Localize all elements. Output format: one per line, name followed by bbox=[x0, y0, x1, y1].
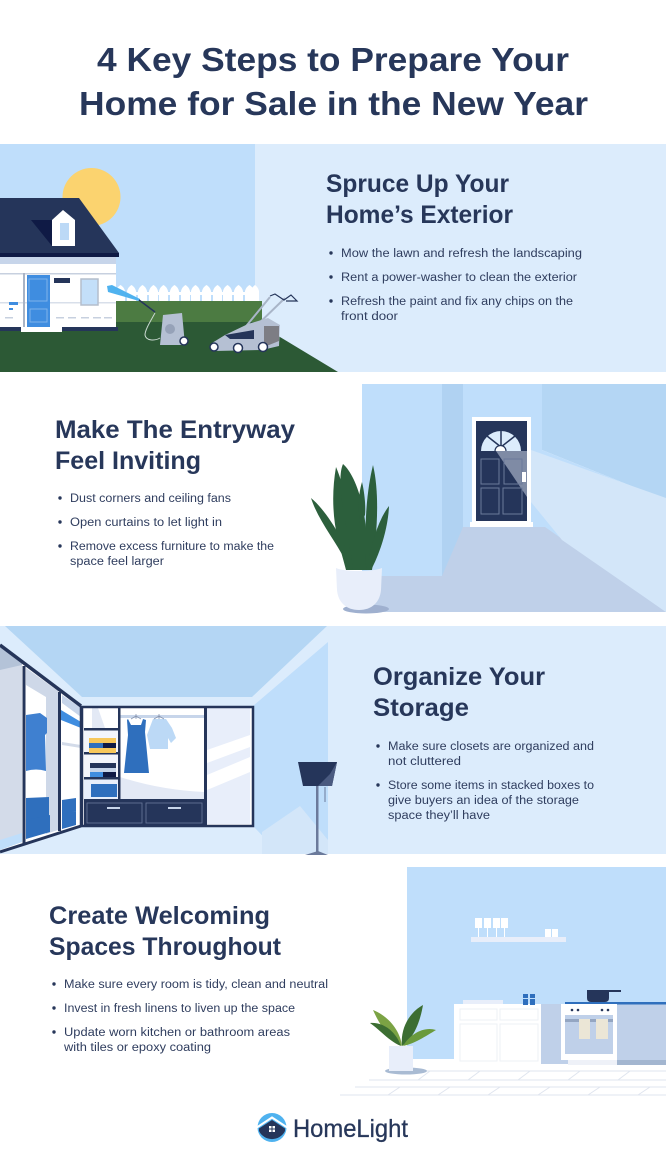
panel: welcoming spaces bbox=[49, 867, 666, 1095]
heading: exterior: Home’s Exterior bbox=[326, 201, 513, 229]
heading: welcoming spaces bbox=[49, 902, 282, 961]
fence bbox=[116, 285, 259, 302]
bullet list: entryway: Open curtains to let light in bbox=[70, 517, 222, 529]
icon: potted snake plant bbox=[311, 464, 389, 614]
bullet list: exterior: front door bbox=[341, 311, 398, 323]
lawn bbox=[0, 322, 338, 372]
stove bbox=[561, 990, 621, 1065]
bullet list: exterior: Mow the lawn and refresh the landscaping bbox=[341, 248, 582, 260]
heading: welcoming spaces: Create Welcoming bbox=[49, 902, 270, 930]
bullet list: storage: give buyers an idea of the storage bbox=[388, 795, 579, 807]
bullet list: exterior: Refresh the paint and fix any chips on the bbox=[341, 296, 573, 308]
hangers bbox=[131, 714, 164, 719]
storage box bbox=[91, 784, 117, 797]
bullet list: welcoming spaces: Invest in fresh linens to liven up the space bbox=[64, 1003, 295, 1015]
floor tiles bbox=[340, 1071, 666, 1095]
light beam bbox=[531, 450, 666, 612]
icon: sun bbox=[62, 168, 120, 226]
panel: storage bbox=[0, 626, 666, 855]
bullet list: exterior: Rent a power-washer to clean the exterior bbox=[341, 272, 577, 284]
kitchen counter bbox=[454, 994, 666, 1065]
bullet list: storage: Store some items in stacked boxes to bbox=[388, 780, 594, 792]
heading: exterior bbox=[326, 170, 513, 229]
heading: storage: Organize Your bbox=[373, 663, 545, 691]
shirt bbox=[147, 719, 176, 749]
dress bbox=[124, 719, 149, 773]
bullet list: storage: space they’ll have bbox=[388, 810, 490, 822]
title: 4 Key Steps to Prepare Your bbox=[97, 41, 569, 78]
icon: potted plant bbox=[370, 1005, 436, 1074]
panel: exterior bbox=[0, 144, 666, 372]
ceiling bbox=[5, 626, 327, 697]
bullet list: storage: Make sure closets are organized and bbox=[388, 741, 594, 753]
hedge bbox=[116, 301, 262, 323]
panel: entryway bbox=[55, 384, 666, 614]
right wall bbox=[253, 642, 328, 854]
bullet list: welcoming spaces bbox=[52, 979, 328, 1054]
bullet list: storage bbox=[376, 741, 594, 822]
bullet list: entryway: Remove excess furniture to make the bbox=[70, 541, 274, 553]
heading: entryway bbox=[55, 416, 295, 475]
window bbox=[81, 279, 98, 305]
heading: entryway: Make The Entryway bbox=[55, 416, 295, 444]
bullet list: entryway: space feel larger bbox=[70, 556, 164, 568]
bullet list: exterior bbox=[329, 248, 582, 323]
icon: floor lamp bbox=[298, 762, 337, 855]
title: Home for Sale in the New Year bbox=[79, 85, 588, 122]
heading: exterior: Spruce Up Your bbox=[326, 170, 509, 198]
logo: HomeLight bbox=[256, 1113, 408, 1143]
closet back bbox=[82, 707, 253, 826]
logo: HomeLight: HomeLight bbox=[293, 1115, 408, 1143]
door bbox=[470, 417, 533, 527]
bullet list: welcoming spaces: with tiles or epoxy coating bbox=[63, 1042, 211, 1054]
door bbox=[27, 275, 50, 327]
icon: house in circle bbox=[256, 1113, 288, 1142]
heading: storage: Storage bbox=[373, 694, 469, 722]
folded clothes bbox=[89, 738, 116, 743]
bullet list: entryway: Dust corners and ceiling fans bbox=[70, 493, 231, 505]
heading: storage bbox=[373, 663, 545, 722]
left closet bbox=[0, 645, 81, 852]
bullet list: storage: not cluttered bbox=[388, 756, 461, 768]
title bbox=[79, 41, 588, 122]
icon: power washer bbox=[160, 313, 188, 345]
heading: welcoming spaces: Spaces Throughout bbox=[49, 933, 282, 961]
heading: entryway: Feel Inviting bbox=[55, 447, 201, 475]
bullet list: welcoming spaces: Update worn kitchen or bathroom areas bbox=[64, 1027, 290, 1039]
icon: lawn mower bbox=[210, 294, 297, 352]
house bbox=[0, 198, 119, 332]
floor bbox=[362, 527, 666, 612]
bullet list: entryway bbox=[58, 493, 274, 568]
bullet list: welcoming spaces: Make sure every room is tidy, clean and neutral bbox=[64, 979, 328, 991]
shelf bbox=[471, 918, 566, 942]
roof bbox=[0, 198, 119, 257]
icon: water spray bbox=[107, 285, 160, 340]
